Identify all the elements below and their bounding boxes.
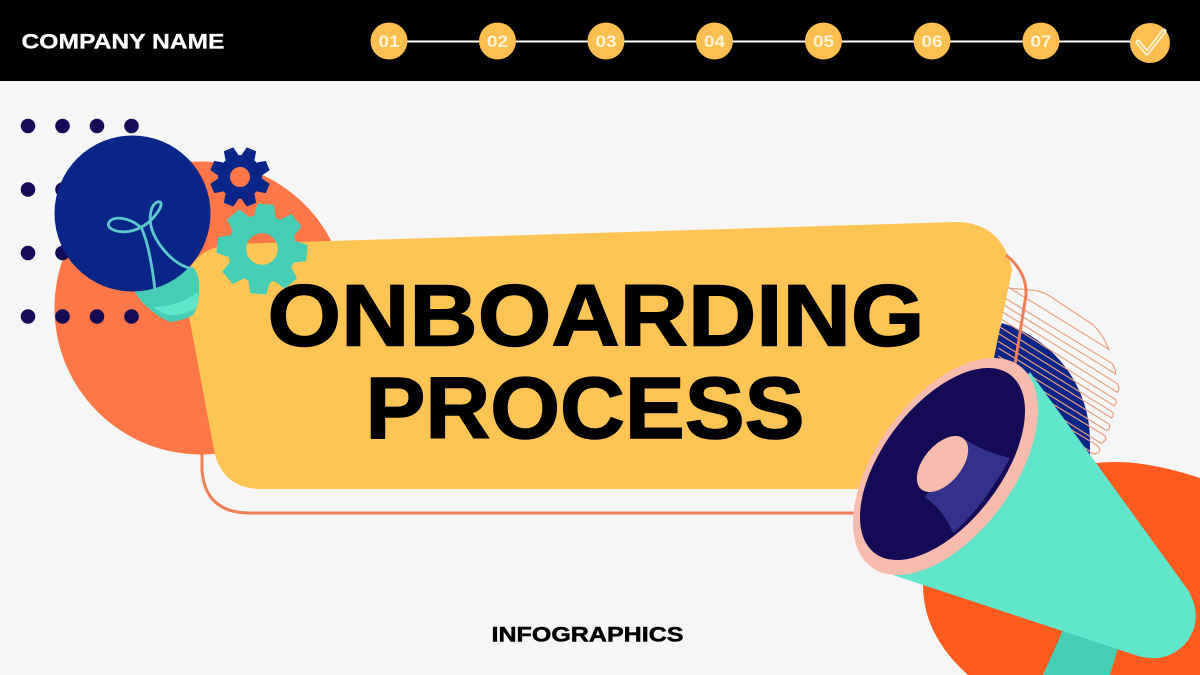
icon: teal gear: [213, 200, 311, 298]
orange outline frame: [202, 255, 1026, 513]
icon: navy gear: [210, 147, 270, 207]
progress steps: 01: [378, 32, 400, 51]
left orange circle: [54, 162, 348, 454]
title: PROCESS: [366, 360, 804, 457]
right navy circle: [985, 323, 1090, 460]
inner hole: [907, 427, 978, 501]
handle: [1043, 630, 1118, 675]
dot grid: [21, 119, 139, 324]
icon: light bulb: [54, 136, 210, 322]
progress steps: [370, 22, 1170, 63]
progress steps: 07: [1030, 32, 1052, 51]
progress steps: 05: [813, 32, 834, 51]
orange shape behind megaphone: [923, 462, 1200, 675]
inner cone: [828, 339, 1057, 589]
header bar: [0, 0, 1200, 81]
progress steps: 04: [704, 32, 726, 51]
progress steps: 02: [487, 32, 508, 51]
filament: [108, 202, 191, 290]
icon: megaphone: [816, 325, 1196, 675]
inner light band: [925, 440, 1010, 533]
yellow title panel: [185, 222, 1012, 489]
title: [268, 267, 924, 457]
bulb base: [134, 267, 199, 322]
subtitle: INFOGRAPHICS: [492, 624, 684, 646]
bulb base highlight: [153, 292, 198, 315]
progress steps: 03: [596, 32, 616, 51]
horn body: [890, 372, 1196, 658]
company name: COMPANY NAME: [22, 30, 224, 54]
progress steps: 06: [922, 32, 942, 51]
striped line shape: [998, 281, 1119, 454]
bulb glass: [54, 136, 210, 292]
rim: [816, 325, 1075, 608]
title: ONBOARDING: [268, 267, 924, 364]
